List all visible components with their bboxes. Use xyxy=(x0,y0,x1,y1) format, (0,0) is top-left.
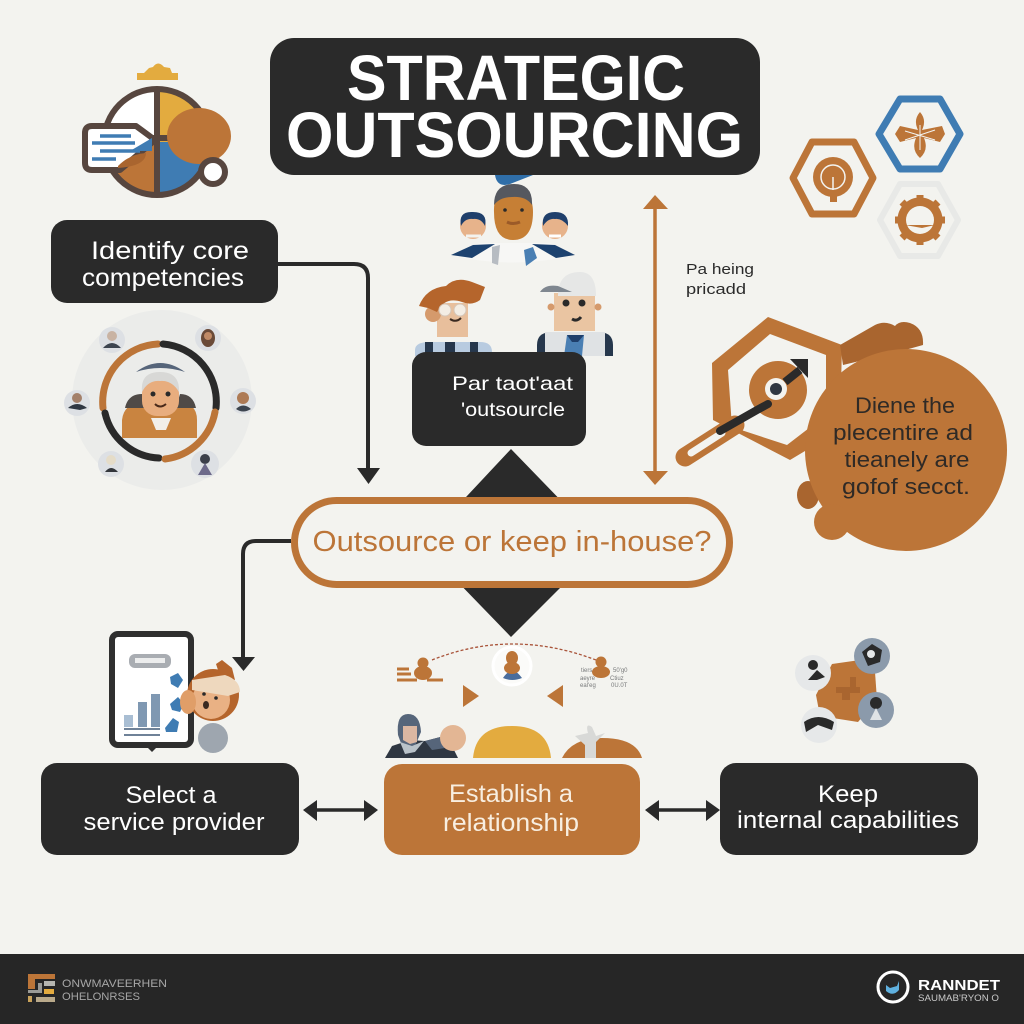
footer text right: SAUMAB'RYON O xyxy=(918,993,999,1004)
box: establish a relationship xyxy=(384,764,640,855)
triangle: left xyxy=(547,685,563,707)
two business people xyxy=(415,272,613,356)
person right with small text: aeyre xyxy=(580,676,596,682)
hexagon icon: gear xyxy=(880,184,958,256)
arrow: decision to provider xyxy=(232,541,291,671)
person right xyxy=(537,272,613,356)
box: select a service provider: Select a xyxy=(126,782,217,809)
person right with small text: eal'eg xyxy=(580,683,596,689)
relationship icons xyxy=(385,644,642,758)
person right with small text xyxy=(580,656,628,689)
double arrow: select to establish xyxy=(303,800,378,821)
box: establish a relationship: relationship xyxy=(443,809,579,837)
person left with lines xyxy=(397,658,443,680)
title: OUTSOURCING xyxy=(286,99,743,171)
triangle: down xyxy=(452,576,572,637)
box: keep internal capabilities xyxy=(720,763,978,855)
double arrow: establish to keep xyxy=(645,800,720,821)
person right with small text: 50'g0 xyxy=(613,668,628,674)
title: STRATEGIC xyxy=(347,42,685,114)
person right with small text: Ctiuz xyxy=(610,676,624,682)
dome with plant xyxy=(562,725,642,758)
callout circle: plecentire ad xyxy=(833,420,973,445)
callout circle: gofof secct. xyxy=(842,474,970,499)
tablet with bar chart and person xyxy=(112,634,240,753)
box: part that outsource: Par taot'aat xyxy=(452,373,574,395)
sun xyxy=(473,726,551,758)
central person xyxy=(122,363,197,438)
footer xyxy=(0,954,1024,1024)
double arrow: vertical xyxy=(643,195,668,485)
box: part that outsource xyxy=(412,352,586,446)
hexagon icon: flower xyxy=(879,99,960,169)
box: keep internal capabilities: internal capabilities xyxy=(737,807,959,834)
box: identify core competencies: competencies xyxy=(82,264,244,292)
box: part that outsource: 'outsourcle xyxy=(461,399,565,421)
people group icon xyxy=(451,175,575,266)
person lying xyxy=(385,714,466,758)
footer text left: ONWMAVEERHEN xyxy=(62,978,167,990)
decision pill xyxy=(294,500,730,584)
title xyxy=(270,38,760,175)
box: establish a relationship: Establish a xyxy=(449,780,573,808)
person centre in ring xyxy=(493,647,531,685)
box: keep internal capabilities: Keep xyxy=(818,781,878,808)
person left xyxy=(415,280,492,356)
box: identify core competencies xyxy=(51,220,278,303)
person right with small text: tiers xyxy=(581,668,592,674)
wrench hexagon icon xyxy=(685,317,842,460)
org circle with avatars xyxy=(64,310,256,490)
label: pa heing: Pa heing xyxy=(686,262,754,278)
hexagon icon: target xyxy=(793,142,873,214)
label: pa heing: pricadd xyxy=(686,282,746,298)
box: select a service provider: service provider xyxy=(84,809,264,836)
avatars xyxy=(64,325,256,478)
keep capabilities icon xyxy=(795,638,894,743)
footer text right xyxy=(918,977,1000,1004)
label: pa heing xyxy=(686,262,754,298)
footer text right: RANNDET xyxy=(918,977,1000,994)
box: identify core competencies: Identify core xyxy=(91,237,249,265)
footer text left: OHELONRSES xyxy=(62,991,140,1003)
box: select a service provider xyxy=(41,763,299,855)
footer logo left xyxy=(28,974,55,1002)
callout circle: Diene the xyxy=(855,393,955,418)
arrow: competencies to decision xyxy=(278,264,380,484)
footer logo right xyxy=(878,972,908,1002)
callout circle: tieanely are xyxy=(844,447,970,472)
triangle: right xyxy=(463,685,479,707)
person right with small text: 0U.0T xyxy=(611,683,628,689)
triangle: up xyxy=(452,449,572,512)
decision pill: Outsource or keep in-house? xyxy=(312,526,712,558)
footer text left xyxy=(62,978,167,1003)
icon: pie chart with note xyxy=(85,64,231,195)
callout circle xyxy=(797,322,1007,551)
